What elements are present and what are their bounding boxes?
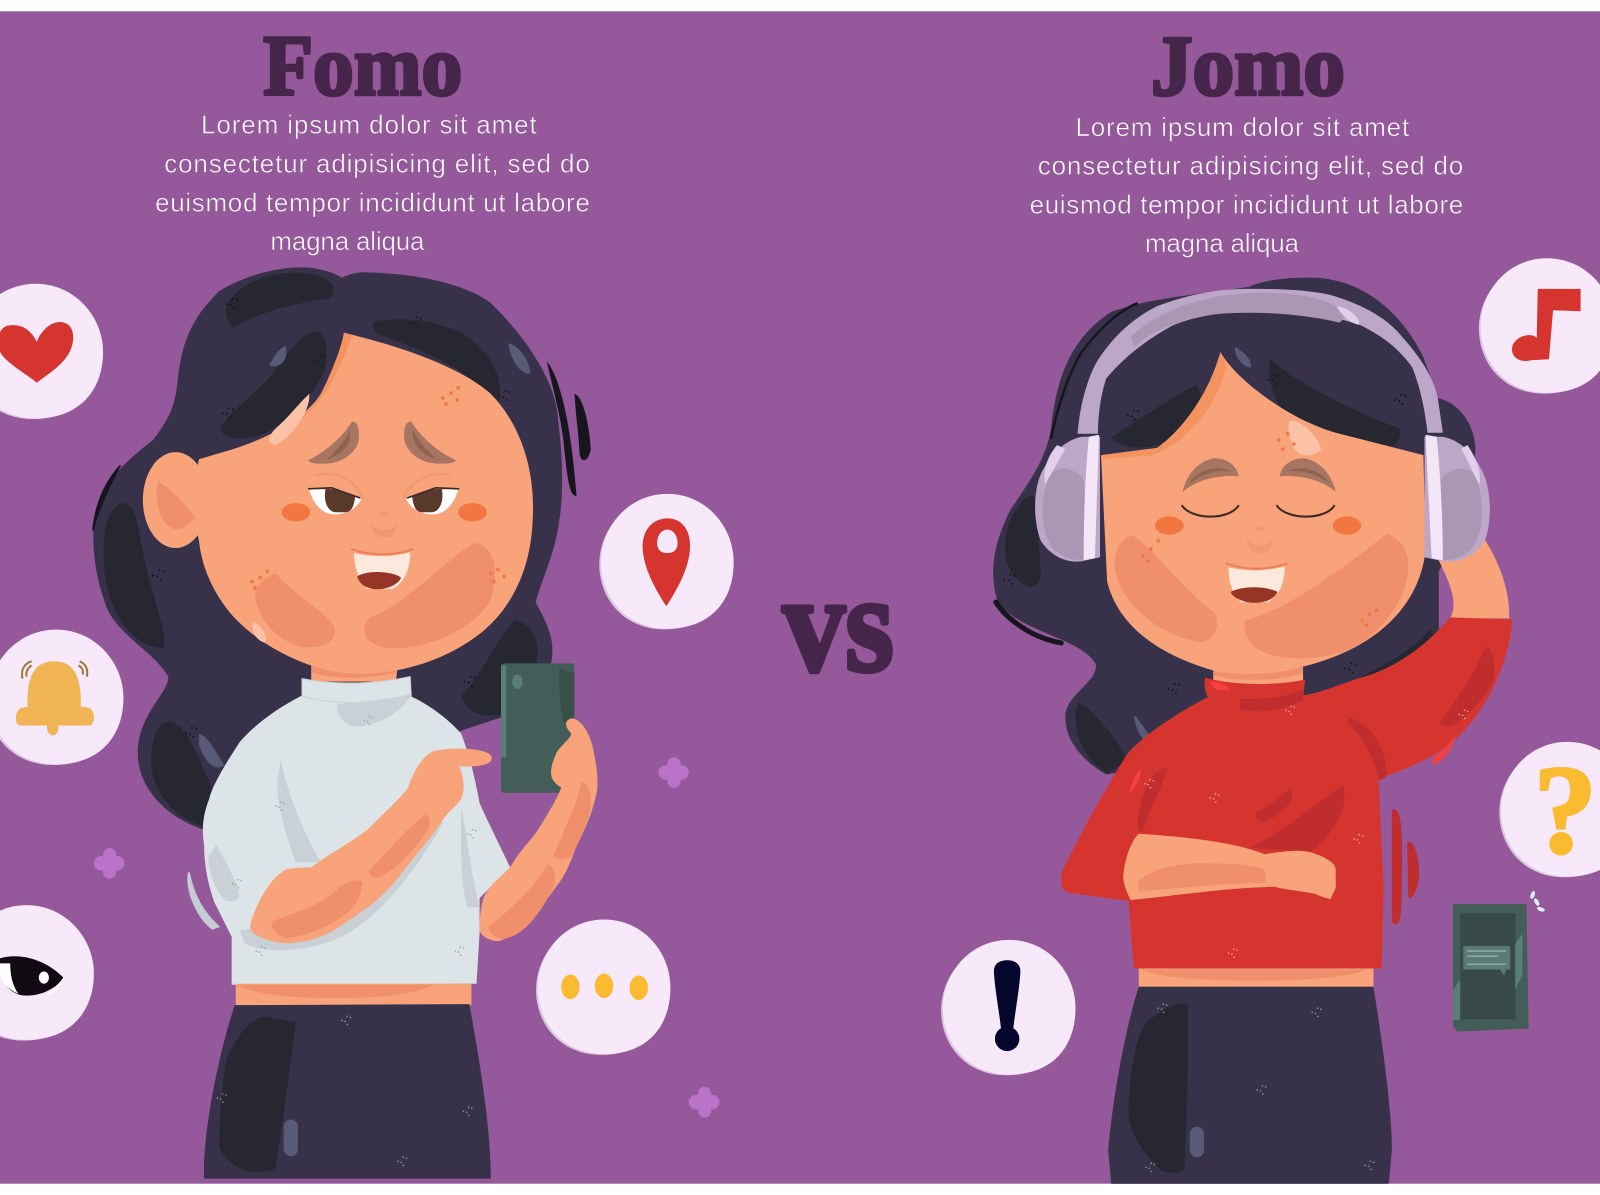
freckles bbox=[1141, 432, 1378, 627]
bubble: typing dots bbox=[536, 919, 670, 1055]
specks on shirt bbox=[233, 716, 476, 955]
bubble: question mark bbox=[1499, 740, 1600, 880]
eyes bbox=[308, 474, 459, 514]
specks on sweater bbox=[1145, 706, 1468, 957]
cheek shading bbox=[1114, 534, 1408, 658]
sparkle bbox=[689, 1087, 719, 1117]
face bbox=[1101, 352, 1426, 674]
phone on side bbox=[1453, 904, 1529, 1032]
text block: Jomo description bbox=[1030, 112, 1463, 258]
bubble: location bbox=[599, 494, 734, 629]
mouth bbox=[1226, 563, 1288, 603]
sparkle bbox=[658, 757, 689, 788]
text block: Fomo description: Lorem ipsum dolor sit amet bbox=[201, 110, 538, 140]
character: Jomo girl with headphones bbox=[993, 278, 1545, 1184]
message bubble bbox=[1463, 946, 1510, 976]
closed eyes bbox=[1182, 505, 1335, 517]
cheek shading bbox=[253, 543, 495, 648]
specks on hair bbox=[1004, 375, 1406, 693]
text block: Fomo description bbox=[155, 110, 590, 256]
mouth bbox=[351, 549, 413, 589]
eyebrows bbox=[308, 421, 456, 464]
text block: Fomo description: consectetur adipisicing elit, sed do bbox=[164, 148, 590, 179]
blush bbox=[1155, 516, 1361, 535]
icon: question mark: ? bbox=[1534, 740, 1597, 880]
specks on skirt bbox=[1146, 1004, 1374, 1171]
hair bbox=[993, 278, 1476, 775]
icon: eye bbox=[0, 956, 63, 996]
waist bbox=[1139, 968, 1373, 987]
ear bbox=[143, 452, 208, 548]
nose bbox=[371, 512, 397, 538]
headphones bbox=[1035, 289, 1490, 562]
text block: Fomo description: magna aliqua bbox=[270, 226, 425, 256]
shirt bbox=[188, 677, 510, 985]
eyebrows bbox=[1183, 458, 1336, 492]
text block: Jomo description: euismod tempor incididunt ut labore bbox=[1030, 189, 1463, 219]
text block: Jomo description: magna aliqua bbox=[1145, 228, 1300, 258]
text block: Jomo description: Lorem ipsum dolor sit amet bbox=[1076, 112, 1410, 142]
sparkle bbox=[94, 848, 124, 879]
neck bbox=[1213, 663, 1303, 686]
nose bbox=[1247, 526, 1272, 553]
arm: pointing hand bbox=[250, 749, 492, 943]
character: Fomo girl with phone bbox=[93, 267, 598, 1179]
sweater bbox=[1061, 617, 1512, 968]
title: Jomo: Jomo bbox=[1151, 18, 1345, 113]
icon: bell bbox=[16, 661, 94, 735]
waist bbox=[236, 984, 471, 1005]
text block: Jomo description: consectetur adipisicing elit, sed do bbox=[1038, 151, 1463, 181]
icon: map pin bbox=[643, 518, 690, 606]
icon: music note bbox=[1512, 289, 1581, 361]
crossed arms bbox=[1123, 834, 1336, 900]
specks on skirt bbox=[217, 1016, 472, 1165]
phone bbox=[501, 663, 574, 793]
skirt bbox=[204, 1004, 491, 1179]
icon: heart bbox=[0, 322, 73, 383]
neck bbox=[311, 663, 398, 682]
face bbox=[143, 333, 533, 674]
bubble: heart bbox=[0, 284, 103, 419]
bubble: eye bbox=[0, 905, 94, 1041]
text block: Fomo description: euismod tempor incididunt ut labore bbox=[155, 187, 590, 217]
hair bbox=[93, 267, 591, 847]
bubble: bell bbox=[0, 630, 123, 765]
vs label: vs bbox=[783, 547, 894, 701]
icon: exclamation mark bbox=[994, 960, 1020, 1051]
notification sparks bbox=[1529, 890, 1545, 913]
freckles bbox=[250, 386, 506, 590]
title: Fomo: Fomo bbox=[263, 18, 462, 113]
blush bbox=[282, 503, 487, 521]
icon: three dots bbox=[561, 974, 648, 1000]
arm behind head bbox=[1438, 532, 1509, 618]
vibration marks bbox=[1392, 809, 1419, 925]
specks on hair bbox=[153, 299, 510, 737]
arm: hand holding phone bbox=[480, 718, 598, 941]
skirt bbox=[1108, 987, 1392, 1184]
bubble: exclamation mark bbox=[941, 940, 1076, 1075]
bubble: music note bbox=[1479, 258, 1600, 394]
